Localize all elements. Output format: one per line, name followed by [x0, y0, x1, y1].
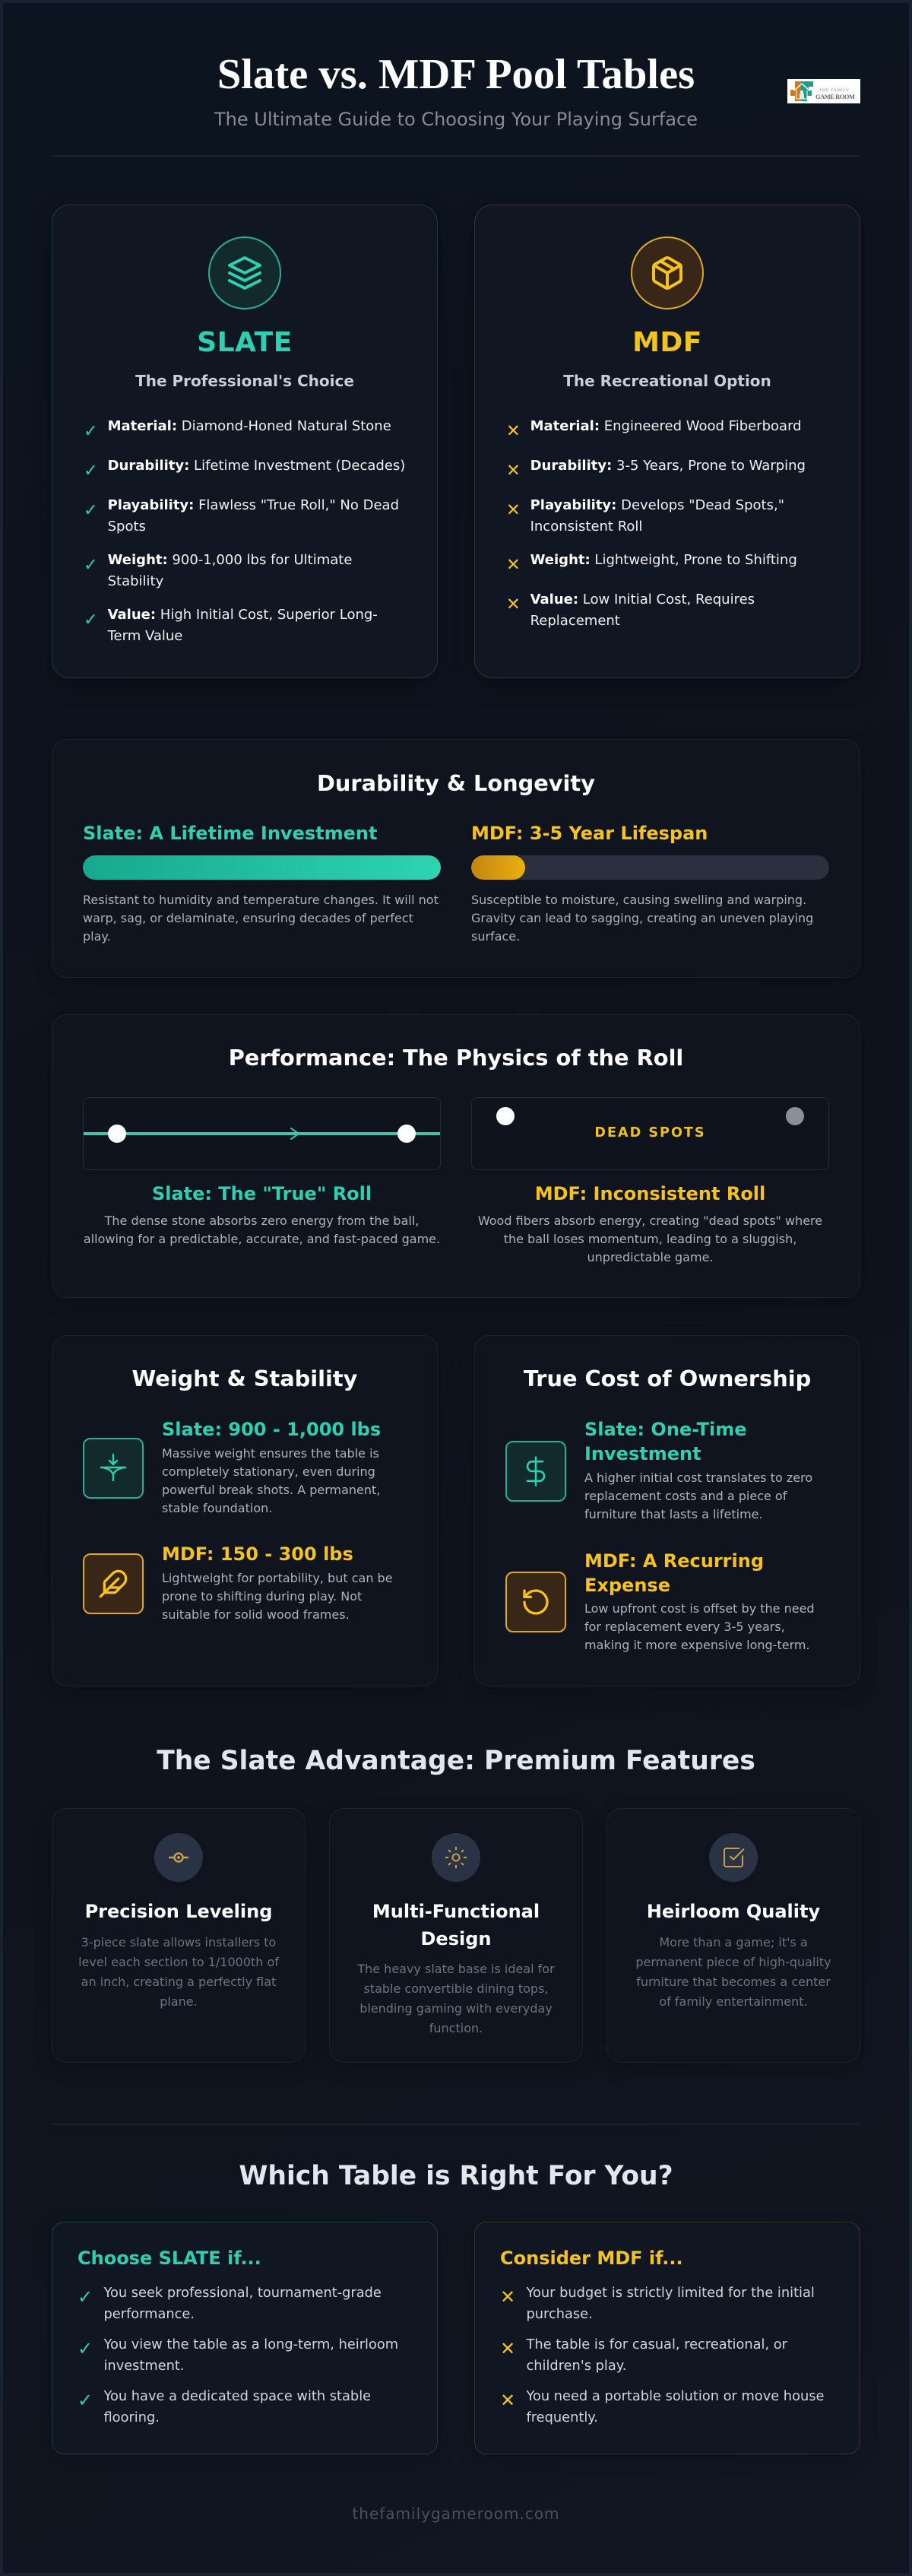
diagram: dead spots — [471, 1097, 829, 1170]
decision list: You have a dedicated space with stable flooring. — [103, 2388, 371, 2425]
slate feature list: Durability: Lifetime Investment (Decades) — [108, 458, 405, 474]
mdf feature list — [506, 418, 806, 629]
logo — [787, 79, 860, 103]
feature title: Multi-Functional Design — [372, 1901, 540, 1949]
panel: heirloom quality — [606, 1808, 860, 2063]
slate lifespan heading: Slate: A Lifetime Investment — [83, 823, 377, 844]
slate feature list: Value: High Initial Cost, Superior Long-Term Value — [108, 607, 378, 644]
decision list: ✓ — [78, 2338, 93, 2359]
mdf feature list: ✕ — [506, 421, 521, 441]
heading: mdf: MDF — [632, 327, 702, 358]
mdf weight text: Lightweight for portability, but can be prone to shifting during play. Not suitable for solid wood frames. — [162, 1571, 393, 1622]
panel: performance — [52, 1014, 860, 1298]
panel: weight and stability — [52, 1335, 438, 1686]
mdf lifespan heading: MDF: 3-5 Year Lifespan — [471, 823, 708, 844]
slate lifespan text: Resistant to humidity and temperature changes. It will not warp, sag, or delaminate, ensuring decades of perfect play. — [83, 893, 439, 944]
heading: True Cost of Ownership — [524, 1366, 811, 1391]
panel: slate card — [52, 205, 438, 678]
mdf feature list: Value: Low Initial Cost, Requires Replacement — [530, 592, 755, 629]
feature title: Heirloom Quality — [647, 1901, 820, 1922]
slate roll text: The dense stone absorbs zero energy from the ball, allowing for a predictable, accurate, and fast-paced game. — [84, 1213, 440, 1246]
mdf roll text: Wood fibers absorb energy, creating "dead spots" where the ball loses momentum, leading to a sluggish, unpredictable game. — [478, 1213, 822, 1264]
slate roll caption: Slate: The "True" Roll — [152, 1183, 372, 1204]
heading: slate: SLATE — [197, 327, 293, 358]
decision heading: Choose SLATE if... — [78, 2248, 261, 2269]
decision heading: Consider MDF if... — [500, 2248, 683, 2269]
slate feature list: ✓ — [84, 610, 98, 630]
decision list: ✕ — [500, 2338, 515, 2359]
mdf cost heading: MDF: A Recurring Expense — [584, 1550, 764, 1596]
panel: mdf card — [474, 205, 860, 678]
mdf feature list: ✕ — [506, 461, 521, 481]
heading: Performance: The Physics of the Roll — [229, 1045, 683, 1071]
decision list: You need a portable solution or move house frequently. — [526, 2388, 824, 2425]
decision list: ✕ — [500, 2286, 515, 2308]
decision list: ✕ — [500, 2390, 515, 2411]
panel: durability — [52, 739, 860, 978]
heading: Weight & Stability — [132, 1366, 357, 1391]
icon: recurring — [505, 1572, 566, 1632]
slate feature list — [84, 418, 405, 644]
logo: GAME ROOM — [815, 93, 855, 100]
mdf cost text: Low upfront cost is offset by the need for replacement every 3-5 years, making it more expensive long-term. — [584, 1601, 815, 1652]
decision list — [500, 2285, 824, 2425]
heading: Durability & Longevity — [317, 770, 595, 796]
mdf feature list: Material: Engineered Wood Fiberboard — [530, 418, 802, 434]
mdf weight heading: MDF: 150 - 300 lbs — [162, 1543, 353, 1565]
heading: premium features: The Slate Advantage: Premium Features — [157, 1746, 755, 1776]
slate cost heading: Slate: One-Time Investment — [584, 1419, 746, 1464]
subtitle: The Ultimate Guide to Choosing Your Playing Surface — [214, 109, 698, 130]
decision list: ✓ — [78, 2286, 93, 2308]
panel: true cost — [474, 1335, 860, 1686]
slate weight text: Massive weight ensures the table is completely stationary, even during powerful break shots. A permanent, stable foundation. — [162, 1446, 380, 1515]
slate weight heading: Slate: 900 - 1,000 lbs — [162, 1419, 381, 1440]
slate feature list: ✓ — [84, 421, 98, 441]
icon: weight — [83, 1438, 144, 1499]
slate feature list: Material: Diamond-Honed Natural Stone — [108, 418, 391, 434]
mdf feature list: ✕ — [506, 555, 521, 575]
title: Slate vs. MDF Pool Tables — [217, 51, 695, 98]
icon: layers — [208, 236, 281, 309]
mdf feature list: Durability: 3-5 Years, Prone to Warping — [530, 458, 806, 474]
tagline: The Recreational Option — [563, 372, 771, 390]
mdf feature list: Weight: Lightweight, Prone to Shifting — [530, 552, 797, 568]
icon: package — [631, 236, 704, 309]
mdf feature list: ✕ — [506, 500, 521, 520]
mdf roll caption: MDF: Inconsistent Roll — [535, 1183, 765, 1204]
decision list: ✓ — [78, 2390, 93, 2411]
slate feature list: ✓ — [84, 500, 98, 520]
panel: choose slate — [52, 2222, 438, 2454]
decision list: You view the table as a long-term, heirloom investment. — [103, 2336, 398, 2374]
icon: dollar — [505, 1441, 566, 1502]
icon: feather — [83, 1553, 144, 1614]
slate lifespan bar — [83, 855, 441, 880]
mdf feature list: ✕ — [506, 595, 521, 614]
slate feature list: Playability: Flawless "True Roll," No Dead Spots — [108, 497, 399, 535]
decision list: You seek professional, tournament-grade performance. — [103, 2285, 382, 2322]
mdf feature list: Playability: Develops "Dead Spots," Inconsistent Roll — [530, 497, 784, 535]
slate feature list: Weight: 900-1,000 lbs for Ultimate Stability — [108, 552, 352, 589]
feature text: More than a game; it's a permanent piece of high-quality furniture that becomes a center of family entertainment. — [635, 1935, 831, 2009]
feature text: 3-piece slate allows installers to level each section to 1/1000th of an inch, creating a perfectly flat plane. — [78, 1935, 279, 2009]
mdf lifespan bar — [471, 855, 829, 880]
logo: THE FAMILY — [819, 89, 849, 93]
diagram: true roll — [83, 1097, 441, 1170]
mdf lifespan text: Susceptible to moisture, causing swelling and warping. Gravity can lead to sagging, creating an uneven playing surface. — [471, 893, 813, 944]
footer: thefamilygameroom.com — [352, 2505, 560, 2523]
diagram: dead spots: DEAD SPOTS — [594, 1125, 706, 1140]
heading: which table: Which Table is Right For You? — [239, 2161, 673, 2191]
icon: sun — [432, 1833, 480, 1882]
icon: level — [154, 1833, 203, 1882]
feature title: Precision Leveling — [85, 1901, 272, 1922]
feature text: The heavy slate base is ideal for stable convertible dining tops, blending gaming with everyday function. — [357, 1962, 555, 2035]
slate cost text: A higher initial cost translates to zero replacement costs and a piece of furniture that lasts a lifetime. — [584, 1470, 812, 1521]
decision list: Your budget is strictly limited for the initial purchase. — [526, 2285, 815, 2322]
decision list — [78, 2285, 398, 2425]
decision list: The table is for casual, recreational, or children's play. — [526, 2336, 787, 2374]
slate feature list: ✓ — [84, 461, 98, 481]
panel: multi-functional — [329, 1808, 583, 2063]
tagline: The Professional's Choice — [135, 372, 354, 390]
panel: consider mdf — [474, 2222, 860, 2454]
slate feature list: ✓ — [84, 555, 98, 575]
icon: check square — [709, 1833, 758, 1882]
panel: precision leveling — [52, 1808, 306, 2063]
